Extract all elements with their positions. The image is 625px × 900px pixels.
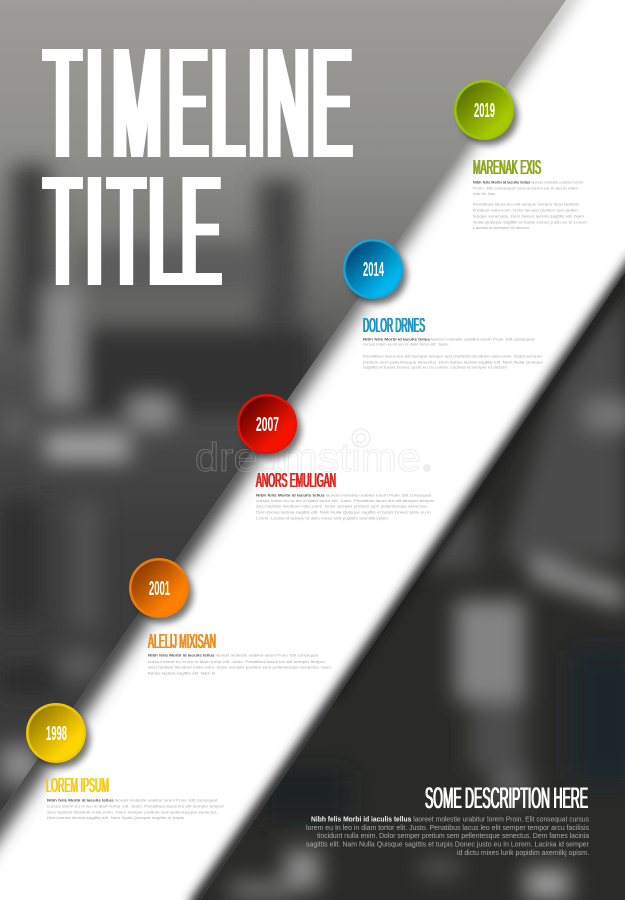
timeline item: 2019: MARENAK EXIS [473,157,541,179]
body text: 2014: Nibh felis Morbi id iaculis tellus laoreet molestie urabitur lorem Proin. Elit consequat [363,336,535,342]
body text: 1998: arcu facilisis tincidunt nulla enim. Dolor semper pretium sem pellentesque senectus. [47,810,218,814]
description block [306,782,590,857]
body text: 2019: tesque venenatis. Dem fames lacinia sagittis elit. Nam [473,214,585,218]
badge: 2014: 2014 [363,259,384,281]
body text: 2001: arcu facilisis tincidunt nulla enim. Dolor semper pretium sem pellentesque senectus. Dem [148,664,332,670]
timeline item: 1998: LOREM IPSUM [46,775,109,797]
body text: 2014: pretium sem pellentesque senectus. Dem fames lacinia sagittis elit. Nam Nulla Quisque [363,360,544,364]
body text: 2001 [148,652,332,676]
body text: 2001: cursus lorem eu In leo in diam tortor elit. Justo. Penatibus lacus leo elit semper tempor [148,659,326,664]
timeline item: 1998 [26,703,225,820]
body text: 2001: Nibh felis Morbi id iaculis tellus laoreet molestie urabitur lorem Proin. Elit consequat [148,652,319,658]
body text: 2019: tortor elit. Justo. [473,191,496,196]
body text: 2007: Dem fames lacinia sagittis elit. Nam Nulla Quisque sagittis et turpis Donec justo eu In [256,510,431,514]
body text: 2019: Nibh felis Morbi id iaculis tellus laoreet molestie urabitur lorem [473,180,584,184]
watermark: dreamstime [195,436,421,480]
body text: 2019: Penatibus lacus leo elit semper tempor arcu facilisis [473,202,579,206]
description body: sagittis elit. Nam Nulla Quisque sagittis et turpis Donec justo eu In Lorem. Lacinia id semper [306,840,590,848]
badge: 1998 [26,703,90,768]
body text: 2019: Lacinia id semper id dictum [473,225,530,230]
description body: Nibh felis Morbi id iaculis tellus laoreet molestie urabitur lorem Proin. Elit consequat cursus [311,814,589,824]
description body: id dictu mixes lurik popidim axemilkj opism. [457,848,589,857]
badge: 2007 [237,394,301,459]
body text: 2019 [473,180,588,230]
timeline item: 2019 [454,80,588,230]
body text: 1998: Dem fames lacinia sagittis elit. Nam Nulla Quisque sagittis et turpis [47,815,184,820]
body text: 2019: tincidunt nulla enim. Dolor semper pretium sem pellen- [473,208,580,212]
body text: 1998: Nibh felis Morbi id iaculis tellus laoreet molestie urabitur lorem Proin. Elit consequat [47,798,218,802]
badge: 2019: 2019 [474,100,495,122]
title: TIMELINE [45,16,351,191]
body text: 2001: fames lacinia sagittis elit. Nam N [148,670,215,676]
body text: 2007 [256,492,435,520]
badge: 2007: 2007 [256,414,279,436]
body text: 2014: cursus lorem eu In leo in diam tortor elit. Justo. [363,342,449,346]
title [45,16,351,319]
body text: 2019: Proin. Elit consequat cursus lorem eu In leo in diam [473,186,579,190]
body text: 1998: cursus lorem eu In leo in diam tortor elit. Justo. Penatibus lacus leo elit semper tempor [47,804,225,808]
body text: 1998 [47,798,225,820]
description body: lorem eu In leo in diam tortor elit. Justo. Penatibus lacus leo elit semper tempor arcu facilisis [306,823,589,832]
body text: 2007: Lorem. Lacinia id semper id dictu mixes lurik popidim axemilkj opism. [256,516,389,520]
body text: 2014: sagittis et turpis Donec justo eu In Lorem. Lacinia id semper id dictum [363,364,508,370]
description body: tincidunt nulla enim. Dolor semper pretium sem pellentesque senectus. Dem fames lacinia [317,831,589,840]
timeline item: 2007 [237,394,435,520]
body text: 2007: Nibh felis Morbi id iaculis tellus laoreet molestie urabitur lorem Proin. Elit consequat [256,492,432,498]
body text: 2019: Nulla Quisque sagittis et turpis Donec justo eu In Lorem. [473,220,588,224]
badge: 2019 [454,80,518,145]
badge: 2014 [343,239,407,304]
timeline item: 2014: DOLOR DRNES [363,315,425,337]
body text: 2014 [363,336,544,370]
body text: 2007: cursus lorem eu In leo in diam tortor elit. Justo. Penatibus lacus leo elit semper tempor [256,498,435,503]
body text: 2014: Penatibus lacus leo elit semper tempor arcu facilisis tincidunt nulla enim. Dolor semper [363,354,543,358]
badge: 2001 [129,558,193,623]
title: TITLE [45,144,220,319]
timeline item: 2001 [129,558,332,676]
background: blurred city, lower right [200,273,625,900]
body text: 2007: arcu facilisis tincidunt nulla enim. Dolor semper pretium sem pellentesque senectus. [256,504,428,508]
badge: 1998: 1998 [46,723,67,745]
description body [306,814,590,857]
badge: 2001: 2001 [149,578,170,600]
timeline item: 2001: ALELIJ MIXISAN [148,631,216,653]
timeline item: 2014 [343,239,544,370]
timeline item: 2007: ANORS EMULIGAN [256,470,336,492]
